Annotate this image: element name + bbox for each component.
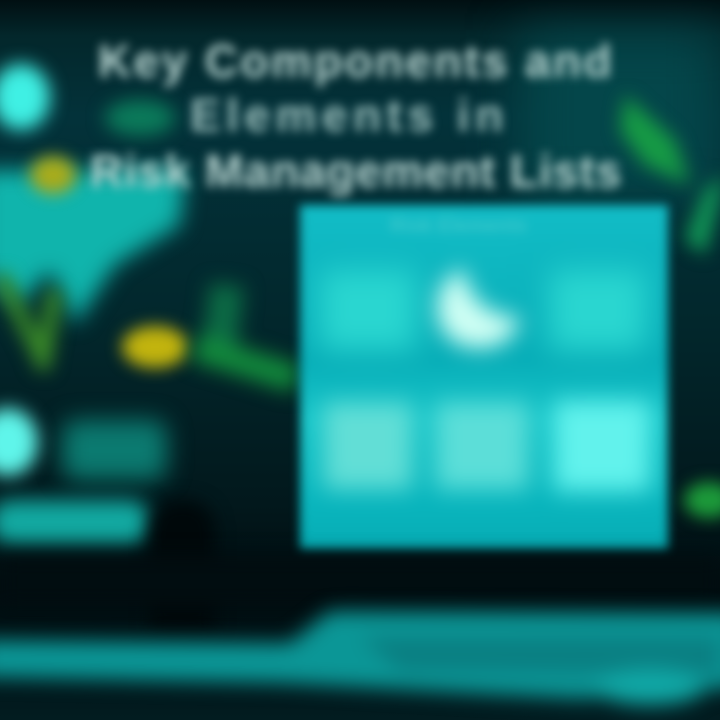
title line 3: Risk Management Lists <box>90 145 622 197</box>
top right dark teal glow <box>520 30 720 200</box>
icon: green branch to panel <box>180 274 302 402</box>
icon: dark silhouette <box>150 500 215 630</box>
left teal glow background <box>0 154 199 332</box>
bottom dark band <box>0 556 720 606</box>
icon: teal platform lower left <box>0 500 150 544</box>
cell: bottom middle <box>436 403 528 489</box>
title <box>85 35 626 203</box>
title line 1: Key Components and <box>98 35 614 87</box>
cell: bottom right <box>554 401 650 491</box>
icon: left plant stems <box>0 263 72 380</box>
icon: cyan circle lower left <box>0 408 38 476</box>
icon: green leaf near title <box>105 100 175 136</box>
icon: yellow dot top left <box>30 156 76 194</box>
panel heading: Risk Elements <box>390 215 527 237</box>
icon: green leaf top right <box>611 92 720 261</box>
cell: bottom left <box>324 403 412 489</box>
icon: center glowing crescent <box>420 256 533 365</box>
title line 2: Elements in <box>190 89 509 141</box>
cell: top right <box>550 270 646 350</box>
icon: yellow oval middle <box>122 326 188 368</box>
cell: top left <box>320 270 416 350</box>
panel: main teal card <box>300 205 668 550</box>
icon: green leaf right edge <box>684 482 720 518</box>
bottom teal wave band <box>0 596 720 720</box>
icon: teal and green plant lower left <box>62 420 167 480</box>
icon: cyan circle top left <box>0 64 50 130</box>
